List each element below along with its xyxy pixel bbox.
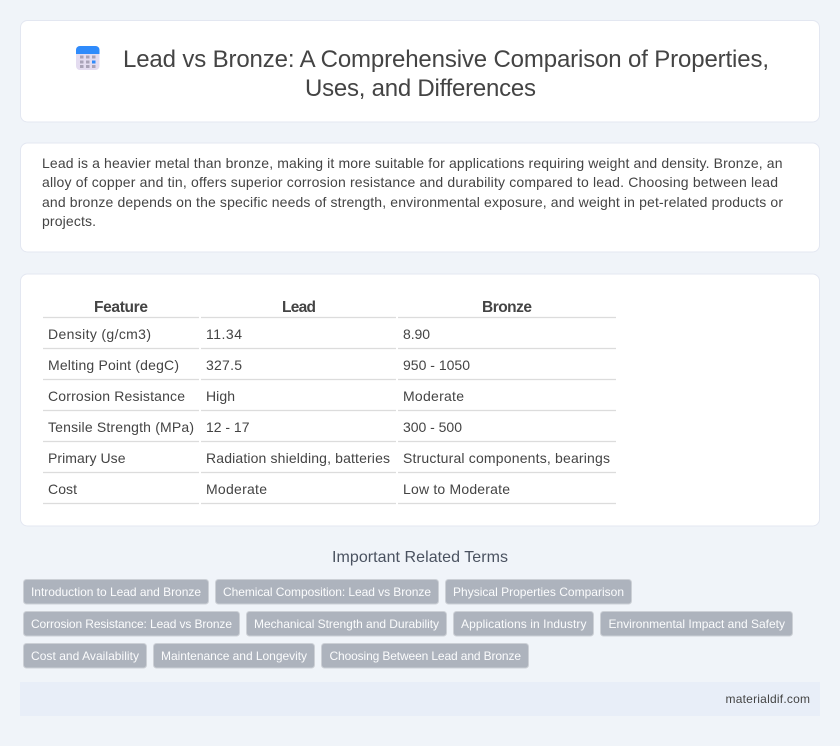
row: corrosion resistance: Moderate [403,388,464,404]
tag: Cost and Availability [31,649,139,663]
row: cost: Cost [48,481,77,497]
row: cost: Low to Moderate [403,481,510,497]
table header: Bronze [482,299,532,316]
panel: introduction text: projects. [42,213,96,229]
panel: introduction text: Lead is a heavier metal than bronze, making it more suitable for applications requiring weight and density. Bronze, an [42,155,782,171]
tag [600,612,792,636]
tag: Applications in Industry [461,617,586,631]
row: density [48,326,430,342]
row: primary use: Primary Use [48,450,126,466]
tag: Choosing Between Lead and Bronze [330,649,521,663]
tag: Environmental Impact and Safety [608,617,785,631]
title: Uses, and Differences [305,75,536,102]
row: tensile strength: 300 - 500 [403,419,462,435]
tag: Physical Properties Comparison [453,585,624,599]
table header: Lead [282,299,316,316]
heading: related terms: Important Related Terms [332,549,508,566]
row: melting point: 327.5 [206,357,242,373]
row: tensile strength [48,419,462,435]
tag [154,644,314,668]
tag: Introduction to Lead and Bronze [31,585,201,599]
tag [322,644,528,668]
table header [94,299,532,316]
row: melting point [48,357,470,373]
row: density: Density (g/cm3) [48,326,151,342]
tag [454,612,594,636]
tag: Corrosion Resistance: Lead vs Bronze [31,617,232,631]
panel: introduction text: and bronze depends on the specific needs of strength, environmental exposure, and weight in pet-related products or [42,194,783,210]
tag: Maintenance and Longevity [161,649,307,663]
row: tensile strength: 12 - 17 [206,419,250,435]
panel: title card [20,20,820,122]
icon: calendar [76,46,100,70]
table header: Feature [94,299,148,316]
row: primary use: Structural components, bearings [403,450,610,466]
row: corrosion resistance [48,388,464,404]
row: cost: Moderate [206,481,267,497]
footer: materialdif.com [726,692,810,706]
tag: Mechanical Strength and Durability [254,617,439,631]
row: density: 11.34 [206,326,242,342]
row: primary use: Radiation shielding, batteries [206,450,390,466]
title: Lead vs Bronze: A Comprehensive Comparison of Properties, [123,46,769,73]
row: primary use [48,450,610,466]
row: cost [48,481,510,497]
panel: comparison table [20,274,820,526]
tag [24,612,240,636]
panel: introduction text [20,143,820,252]
row: density: 8.90 [403,326,430,342]
footer [20,682,820,716]
tag [24,580,208,604]
tags: related terms [24,580,792,668]
title [123,46,769,102]
tag [446,580,632,604]
panel: introduction text: alloy of copper and tin, offers superior corrosion resistance and durability compared to lead. Choosing between lead [42,174,778,190]
row: corrosion resistance: High [206,388,235,404]
row: melting point: 950 - 1050 [403,357,470,373]
row: corrosion resistance: Corrosion Resistance [48,388,185,404]
tag [216,580,438,604]
row: melting point: Melting Point (degC) [48,357,179,373]
tag [24,644,146,668]
tag [246,612,446,636]
tag: Chemical Composition: Lead vs Bronze [223,585,431,599]
row: tensile strength: Tensile Strength (MPa) [48,419,194,435]
